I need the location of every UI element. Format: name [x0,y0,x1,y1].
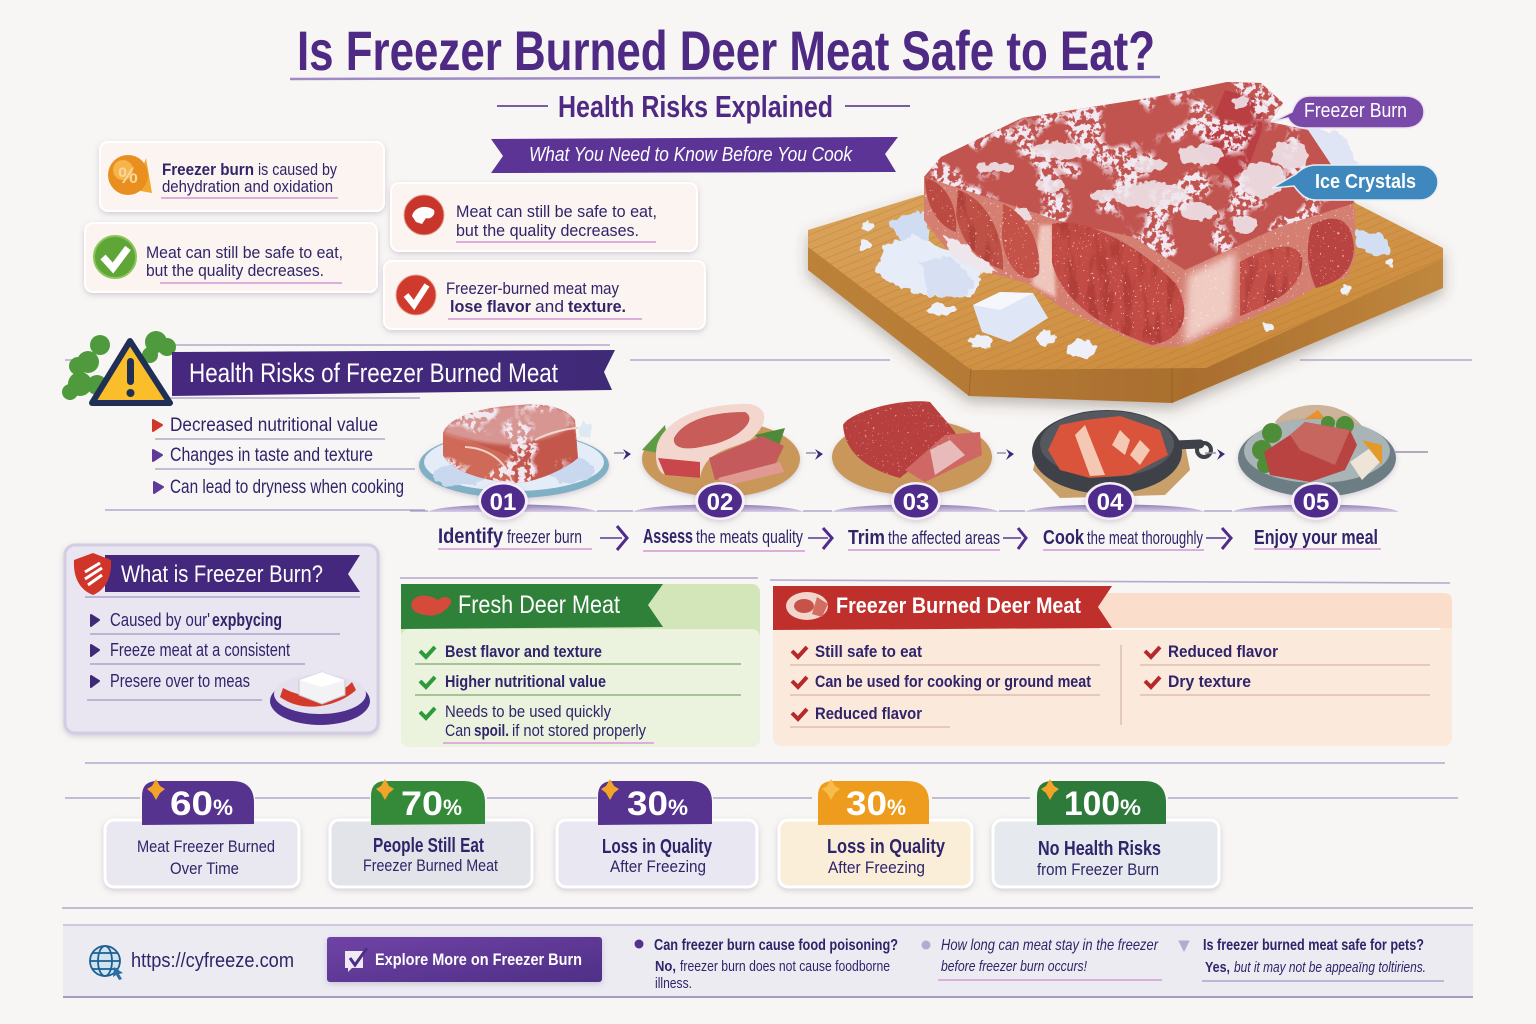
faq: how long: How long can meat stay in the freezer [941,937,1159,954]
icon: orange badge: % [118,163,138,188]
heading ribbon [105,555,360,592]
heading: health risks: Health Risks of Freezer Burned Meat [189,358,558,388]
icon: red shield [74,553,111,595]
stat: 30% purple [557,779,757,887]
card: safe to eat red: Meat can still be safe to eat, [456,202,657,221]
stat: 30% purple: Loss in Quality [602,836,713,858]
step labels: Identify [438,525,503,548]
step 2 image: cut steak on board [642,404,800,497]
faq: pets [1179,937,1444,981]
icon: orange badge [108,155,152,195]
badge 02: 02 [707,489,733,516]
panel: freezer burned deer meat [770,580,1452,746]
panel: fresh deer meat: Best flavor and texture [445,642,602,661]
icon: red meat [411,596,451,616]
card: freezer burn cause: Freezer burn [162,160,254,179]
faq: food poisoning [634,937,898,992]
card: freezer burn cause: dehydration and oxidation [162,177,333,196]
card: safe to eat red [391,183,697,251]
badge 05: 05 [1303,489,1329,516]
stat: 100% [993,779,1219,887]
stat: 60%: Over Time [170,859,239,878]
button: explore more: Explore More on Freezer Burn [375,950,582,969]
faq: pets: Yes, [1205,959,1230,976]
badge 01 [478,482,528,520]
step labels: the meat thoroughly [1087,528,1203,548]
header band [773,586,1112,630]
panel: fresh deer meat: Needs to be used quickly [445,702,611,721]
step labels [438,525,1381,551]
stat: 70% [330,779,532,887]
banner [172,350,615,396]
step labels: the meats quality [696,527,803,547]
callout: freezer burn: Freezer Burn [1304,100,1407,122]
list: health risks [153,415,404,498]
icon: red meat badge [404,195,444,235]
card: lose flavor: lose flavor [450,297,531,316]
meat side muscles [924,177,1355,347]
step 5 image: plated meal [1238,405,1396,497]
callout: ice crystals: Ice Crystals [1315,171,1416,193]
step number badges [478,482,1341,520]
stat: 30% purple: 30 [627,785,668,823]
header band [401,584,663,629]
badge 01: 01 [490,489,516,516]
step labels: freezer burn [507,527,582,547]
panel: freezer burned deer meat: Can be used for cooking or ground meat [815,672,1091,691]
ribbon: what you need to know [491,137,898,173]
icon: star [601,779,619,800]
stat: 60%: Meat Freezer Burned [137,837,275,856]
back ice [1300,125,1358,172]
big ice cube [859,222,1395,358]
panel: what is freezer burn: What is Freezer Burn? [121,561,323,588]
panel: freezer burned deer meat: Still safe to eat [815,642,922,661]
subtitle: Health Risks Explained [558,89,833,124]
stat: 70%: 70 [401,785,443,823]
hero: meat on cutting board [808,82,1443,403]
badge 03 [891,482,941,520]
faq: how long [922,937,1162,980]
stat: 100%: 100 [1064,785,1120,823]
stat: 60% [105,779,299,887]
card: safe to eat green: Meat can still be safe to eat, [146,243,343,262]
stat: 100%: from Freezer Burn [1037,860,1159,879]
checklist [420,647,435,718]
heading: health risks [62,331,615,403]
stat: 70%: % [443,795,462,820]
panel: fresh deer meat: spoil. [474,721,509,740]
badge 04 [1085,482,1135,520]
badge 05 [1291,482,1341,520]
list [91,610,290,691]
step labels: Assess [643,526,693,548]
card: safe to eat green [85,223,377,292]
panel: freezer burned deer meat: Dry texture [1168,672,1251,691]
card: lose flavor: Freezer-burned meat may [446,279,619,298]
small arrows between steps [614,449,1428,460]
list: health risks: Changes in taste and texture [170,445,373,466]
panel: freezer burned deer meat: Freezer Burned Deer Meat [836,593,1082,618]
card: safe to eat green: but the quality decreases. [146,261,324,280]
stat: 30% purple: % [668,795,688,820]
stat: 30% orange [779,779,972,887]
url: https://cyfreeze.com [131,950,294,972]
list: Freeze meat at a consistent [110,640,290,660]
panel: fresh deer meat: Can [445,721,471,740]
stat: 60%: 60 [170,785,213,823]
callout: freezer burn [1272,96,1424,128]
step labels: Enjoy your meal [1254,527,1378,549]
stat: 70%: Freezer Burned Meat [363,856,498,875]
footer panel [63,925,1473,997]
panel: fresh deer meat: Higher nutritional value [445,672,606,691]
panel: what is freezer burn [65,545,378,733]
card: freezer burn cause [100,142,384,211]
stat: 100%: No Health Risks [1038,838,1161,860]
faq: how long: before freezer burn occurs! [941,958,1088,975]
step 4 image: meat in skillet [1032,410,1211,498]
left ice pile [875,210,985,297]
step arrows [600,526,1231,550]
icon: globe [90,946,123,980]
icon: leaves [62,331,176,400]
faq: food poisoning: No, [655,958,676,975]
icon: star [147,779,165,800]
pedestals [428,504,1399,512]
panel: fresh deer meat [400,578,760,747]
icon: green check [94,236,136,278]
stat: 100%: % [1120,795,1141,820]
meat body [924,82,1355,347]
button: explore more [327,937,602,982]
icon: star [376,779,394,800]
card: freezer burn cause: is caused by [258,160,337,179]
divider lines [65,345,1472,360]
step labels: the affected areas [888,528,1000,548]
checklist left [792,647,1160,719]
card: lose flavor: and [535,297,564,316]
list: expbycing [212,610,282,630]
step labels: Trim [848,527,885,549]
stat: 60%: % [213,795,233,820]
list: Caused by our' [110,610,210,630]
meat top surface [924,82,1355,270]
stat: 30% orange: % [887,795,906,820]
icon: frozen block on dish [270,672,370,725]
list: Presere over to meas [110,671,250,691]
faq: pets: Is freezer burned meat safe for pets? [1203,937,1424,954]
stat: 30% orange: After Freezing [828,858,925,877]
frost between muscles [945,235,1000,275]
card: lose flavor: texture. [568,297,626,316]
icon: star [822,779,840,800]
card: safe to eat red: but the quality decreases. [456,221,639,240]
list: health risks: Decreased nutritional value [170,415,378,436]
title: Is Freezer Burned Deer Meat Safe to Eat? [297,19,1155,82]
stat: 30% orange: Loss in Quality [827,836,946,858]
icon: warning triangle [92,341,170,403]
right ice [1355,230,1390,256]
panel: fresh deer meat: Fresh Deer Meat [458,591,620,619]
faq: food poisoning: Can freezer burn cause food poisoning? [654,937,898,954]
checklist right: Reduced flavor [1168,642,1278,661]
icon: meat cut [786,592,828,620]
badge 04: 04 [1097,489,1124,516]
stat: 30% purple: After Freezing [610,857,706,876]
ribbon: what you need to know: What You Need to Know Before You Cook [529,144,853,166]
badge 02 [695,482,745,520]
callout: ice crystals [1272,165,1438,200]
faq: food poisoning: freezer burn does not cause foodborne [680,958,890,975]
faq: pets: but it may not be appeaïng toltiriens. [1234,959,1426,976]
ice crystals on top [924,82,1355,270]
panel: fresh deer meat: if not stored properly [512,721,646,740]
stat: 30% orange: 30 [846,785,887,823]
faq: food poisoning: illness. [655,975,692,992]
badge 03: 03 [903,489,929,516]
stat: 70%: People Still Eat [373,835,484,857]
step 1 image: frozen meat on plate [419,404,609,498]
step labels: Cook [1043,527,1085,549]
cutting board [808,195,1443,403]
card: lose flavor [384,261,705,329]
pale fat bands [1184,252,1236,344]
list: health risks: Can lead to dryness when cooking [170,477,404,498]
icon: red check [396,275,436,315]
panel: freezer burned deer meat: Reduced flavor [815,704,922,723]
icon: star [1041,779,1059,800]
step 3 image: trimmed meat on board [832,401,992,495]
